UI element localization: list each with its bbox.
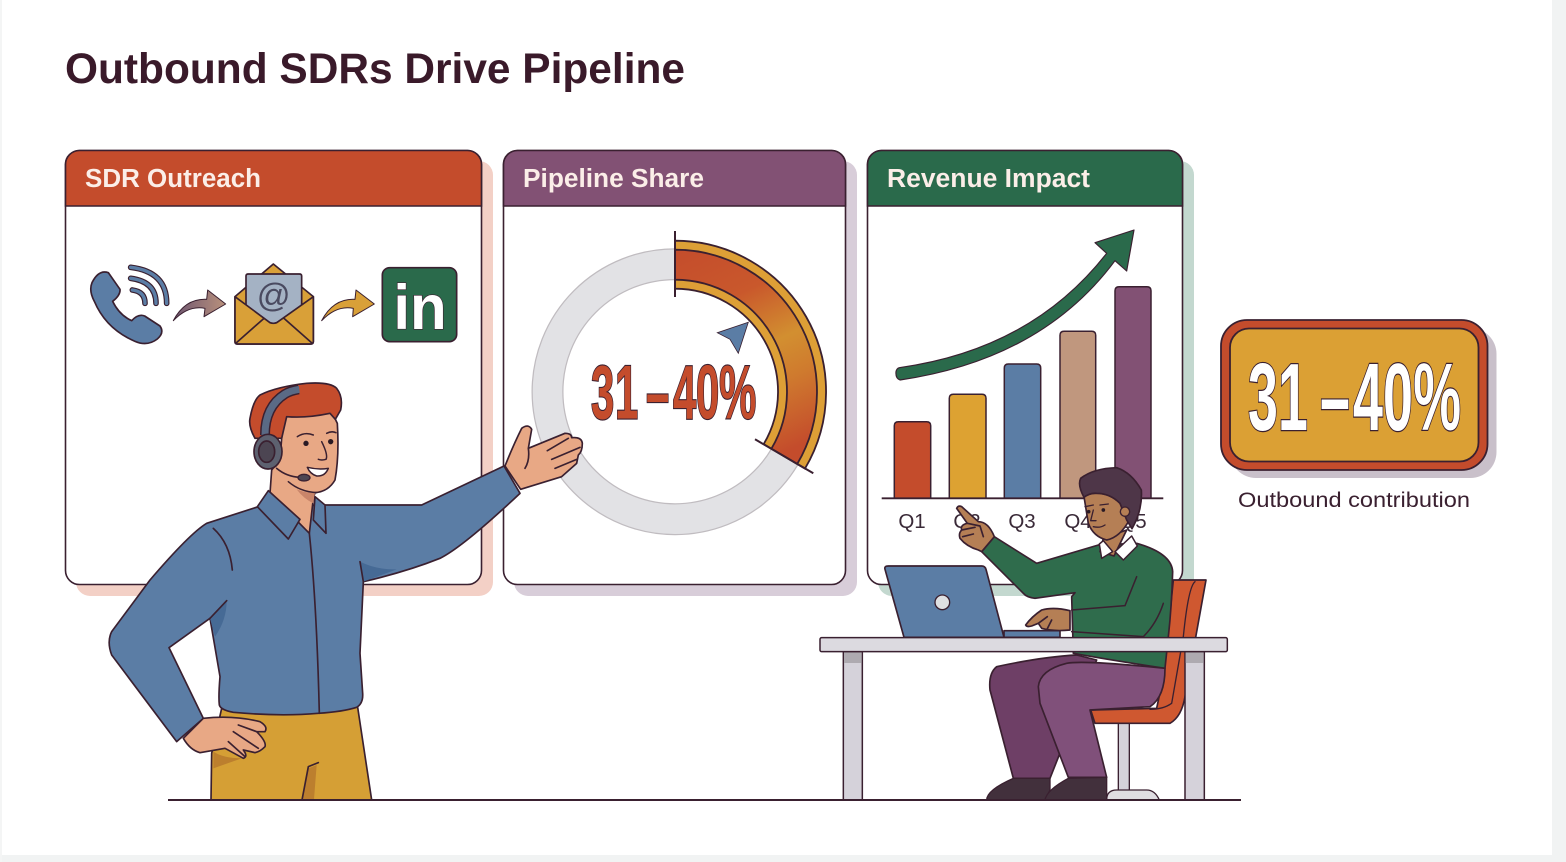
icon: LinkedIn: in xyxy=(393,273,447,343)
icon: LinkedIn xyxy=(382,268,457,343)
bar chart xyxy=(882,287,1163,533)
raised hand xyxy=(505,426,582,489)
ground line xyxy=(168,799,1241,801)
shirt collar xyxy=(257,491,326,539)
caption: Outbound contribution: Outbound contribution xyxy=(1238,489,1470,512)
icon: email envelope xyxy=(235,264,313,344)
heading: SDR Outreach: SDR Outreach xyxy=(85,165,261,193)
icon: email envelope: @ xyxy=(257,278,291,315)
arrow: growth trend xyxy=(896,230,1134,380)
pointer xyxy=(717,322,748,353)
typing hand xyxy=(1026,608,1070,631)
shirt collar xyxy=(1099,536,1137,560)
bar chart: Q3 xyxy=(1008,510,1036,533)
heading: Pipeline Share: Pipeline Share xyxy=(523,165,704,193)
desk xyxy=(820,638,1227,800)
outreach icons xyxy=(91,264,457,344)
icon: phone xyxy=(91,267,167,344)
donut gauge xyxy=(548,231,826,519)
title: Outbound SDRs Drive Pipeline xyxy=(65,45,685,93)
laptop xyxy=(885,566,1060,637)
trousers xyxy=(990,655,1165,778)
badge value: 31–40% xyxy=(1248,345,1461,451)
illustration: presenter with headset xyxy=(109,383,582,800)
arrow: phone to email xyxy=(173,290,226,321)
illustration: analyst at desk xyxy=(820,468,1227,800)
head xyxy=(1080,468,1141,556)
arrow: email to LinkedIn xyxy=(322,290,374,321)
pointing hand xyxy=(957,506,994,552)
heading: Revenue Impact: Revenue Impact xyxy=(887,165,1091,193)
bar chart: Q4 xyxy=(1064,510,1092,533)
bar chart: Q2 xyxy=(953,510,981,533)
trousers xyxy=(211,705,372,800)
sweater xyxy=(982,537,1173,668)
bar chart: Q5 xyxy=(1119,510,1147,533)
head xyxy=(250,383,341,533)
gauge value: 31–40% xyxy=(591,349,756,435)
panel: Revenue Impact xyxy=(868,150,1194,596)
shoes xyxy=(987,777,1107,800)
callout: stat badge xyxy=(1221,320,1496,478)
chair xyxy=(1091,580,1206,800)
panel: SDR Outreach xyxy=(66,150,493,596)
headset xyxy=(254,389,310,481)
bar chart: Q1 xyxy=(898,510,926,533)
shirt xyxy=(109,466,520,742)
hand on hip xyxy=(183,717,266,758)
panel: Pipeline Share xyxy=(504,150,857,596)
